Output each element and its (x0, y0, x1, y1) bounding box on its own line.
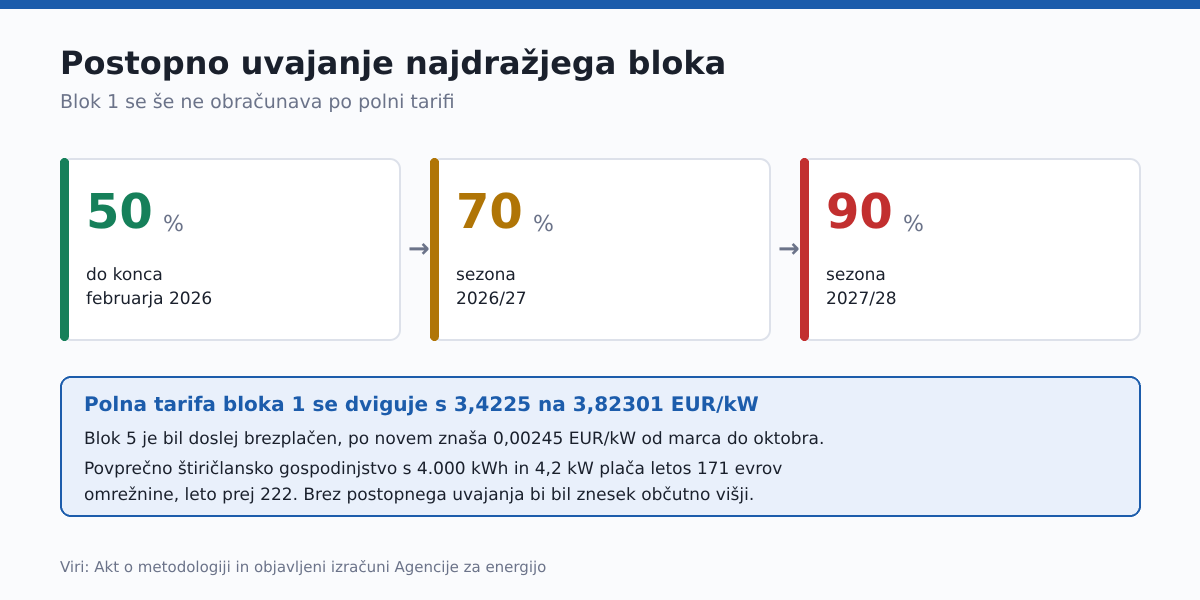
card: 50 %: do konca (86, 265, 163, 285)
callout line 1: Blok 5 je bil doslej brezplačen, po novem znaša 0,00245 EUR/kW od marca do oktobra. (84, 429, 824, 449)
card: 90 % (800, 158, 1141, 341)
arrow 1: → (408, 234, 430, 264)
top bar (0, 0, 1200, 9)
card: 50 %: % (163, 212, 184, 237)
card: 90 %: % (903, 212, 924, 237)
card: 90 %: 2027/28 (826, 289, 897, 309)
card: 70 % (430, 158, 771, 341)
callout lines 2-3: Povprečno štiričlansko gospodinjstvo s 4.000 kWh in 4,2 kW plača letos 171 evrov (84, 459, 782, 479)
source: Viri: Akt o metodologiji in objavljeni izračuni Agencije za energijo (60, 558, 546, 576)
card: 70 %: % (533, 212, 554, 237)
subtitle: Blok 1 se še ne obračunava po polni tarifi (60, 91, 455, 113)
card: 70 %: sezona (456, 265, 516, 285)
title: Postopno uvajanje najdražjega bloka (60, 44, 726, 82)
callout lines 2-3 (84, 459, 782, 505)
callout lines 2-3: omrežnine, leto prej 222. Brez postopnega uvajanja bi bil znesek občutno višji. (84, 485, 754, 505)
card: 90 %: 90 (826, 184, 893, 240)
callout (60, 376, 1141, 517)
arrow 2: → (778, 234, 800, 264)
card: 50 %: februarja 2026 (86, 289, 212, 309)
card: 70 %: 2026/27 (456, 289, 527, 309)
card: 50 %: 50 (86, 184, 153, 240)
card: 50 % (60, 158, 401, 341)
callout heading: Polna tarifa bloka 1 se dviguje s 3,4225 na 3,82301 EUR/kW (84, 392, 759, 416)
card: 70 %: 70 (456, 184, 523, 240)
card: 90 %: sezona (826, 265, 886, 285)
